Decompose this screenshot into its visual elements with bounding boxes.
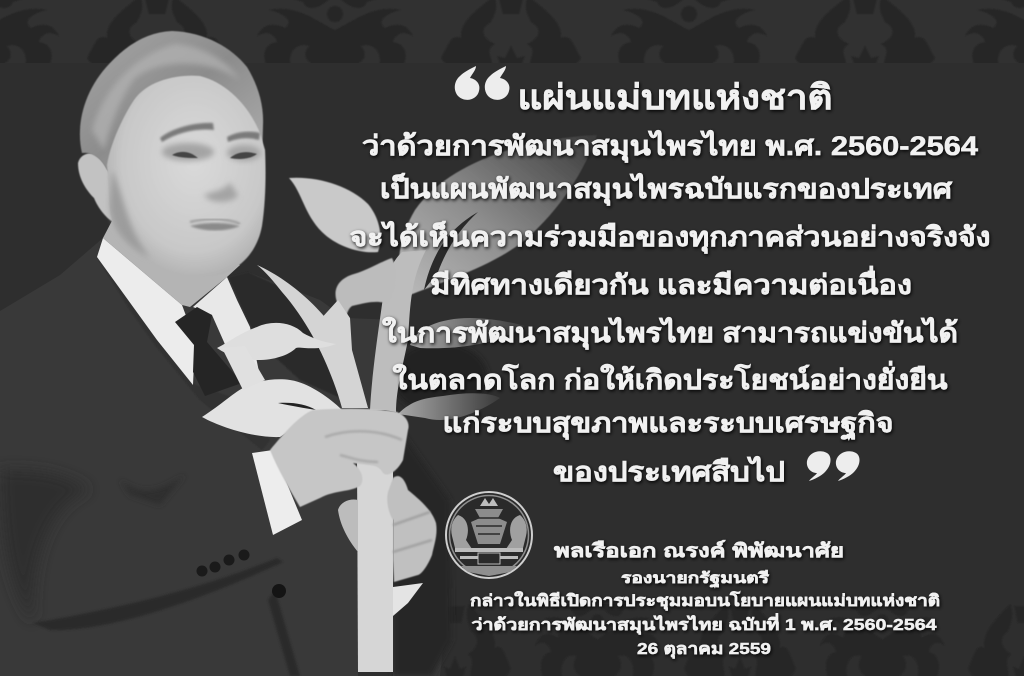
hair highlight [92,44,240,150]
right eye socket [227,145,261,161]
quote mark: closing [807,451,860,481]
speaker name: พลเรือเอก ณรงค์ พิพัฒนาศัย [554,540,844,562]
leaf vein [424,212,478,290]
right arm shadow [393,420,452,676]
occasion line 1: กล่าวในพิธีเปิดการประชุมมอบนโยบายแผนแม่บทแห่งชาติ [470,590,940,611]
curved branch left [257,265,368,408]
upper left leaf [289,178,380,252]
finger shadow [325,431,402,462]
right eye [230,152,257,159]
leaf right upper [410,318,525,348]
branch into stem [318,300,368,408]
sleeve buttons [196,550,250,576]
jacket lapel [97,238,270,450]
main stem [357,455,393,672]
right eyebrow [227,132,260,142]
head [78,31,266,277]
herbal tree in front of suit [202,178,525,672]
attribution text [470,540,940,659]
mouth [190,223,240,230]
left shirt cuff [252,450,302,535]
government seal [446,492,532,578]
top damask band [0,0,1024,66]
mid stem [370,250,426,412]
quote line 3: เป็นแผนพัฒนาสมุนไพรฉบับแรกของประเทศ [380,171,953,206]
bottom damask band [444,608,1020,676]
quote line 2: ว่าด้วยการพัฒนาสมุนไพรไทย พ.ศ. 2560-2564 [362,130,978,163]
sleeve folds [0,470,90,623]
quote line 9: ของประเทศสืบไป [553,456,785,487]
face [107,76,266,277]
branch link between leaves [222,346,265,390]
leaf vein dark [278,403,316,410]
right shirt cuff [393,583,423,616]
quote line 8: แก่ระบบสุขภาพและระบบเศรษฐกิจ [442,408,894,441]
lower left leaf [202,379,342,437]
hands [252,409,437,616]
cheek shading [110,170,150,258]
neck [103,215,240,307]
quote mark: opening [455,66,509,100]
quote title: แผ่นแม่บทแห่งชาติ [518,79,832,117]
suit jacket [0,238,448,676]
date: 26 ตุลาคม 2559 [637,641,771,659]
right hand [387,476,437,582]
left hand fingers behind stem [338,499,358,552]
ear [78,153,113,222]
quote line 7: ในตลาดโลก ก่อให้เกิดประโยชน์อย่างยั่งยืน [392,360,948,395]
nose shadow [204,182,238,202]
left eyebrow [160,123,214,142]
left hand [270,409,409,507]
dark shadow behind right arm [392,342,488,414]
left eye [172,152,198,158]
hair [80,31,263,170]
leaf right lower [398,393,500,420]
quote text [350,79,990,487]
shirt right collar [193,277,262,387]
mid left leaf [217,323,336,360]
big grey leaf [398,135,597,300]
mid small leaf [336,258,395,332]
right lapel [228,272,345,400]
quote line 4: จะได้เห็นความร่วมมือของทุกภาคส่วนอย่างจริงจัง [350,219,990,254]
jacket button [272,584,286,598]
speaker title: รองนายกรัฐมนตรี [621,570,770,588]
tie [175,307,242,396]
quote line 5: มีทิศทางเดียวกัน และมีความต่อเนื่อง [430,265,912,300]
quote line 6: ในการพัฒนาสมุนไพรไทย สามารถแข่งขันได้ [382,317,958,350]
shirt left collar [97,238,195,385]
left eye socket [162,143,214,161]
occasion line 2: ว่าด้วยการพัฒนาสมุนไพรไทย ฉบับที่ 1 พ.ศ. 2560-2564 [472,613,937,635]
person body [0,215,452,676]
